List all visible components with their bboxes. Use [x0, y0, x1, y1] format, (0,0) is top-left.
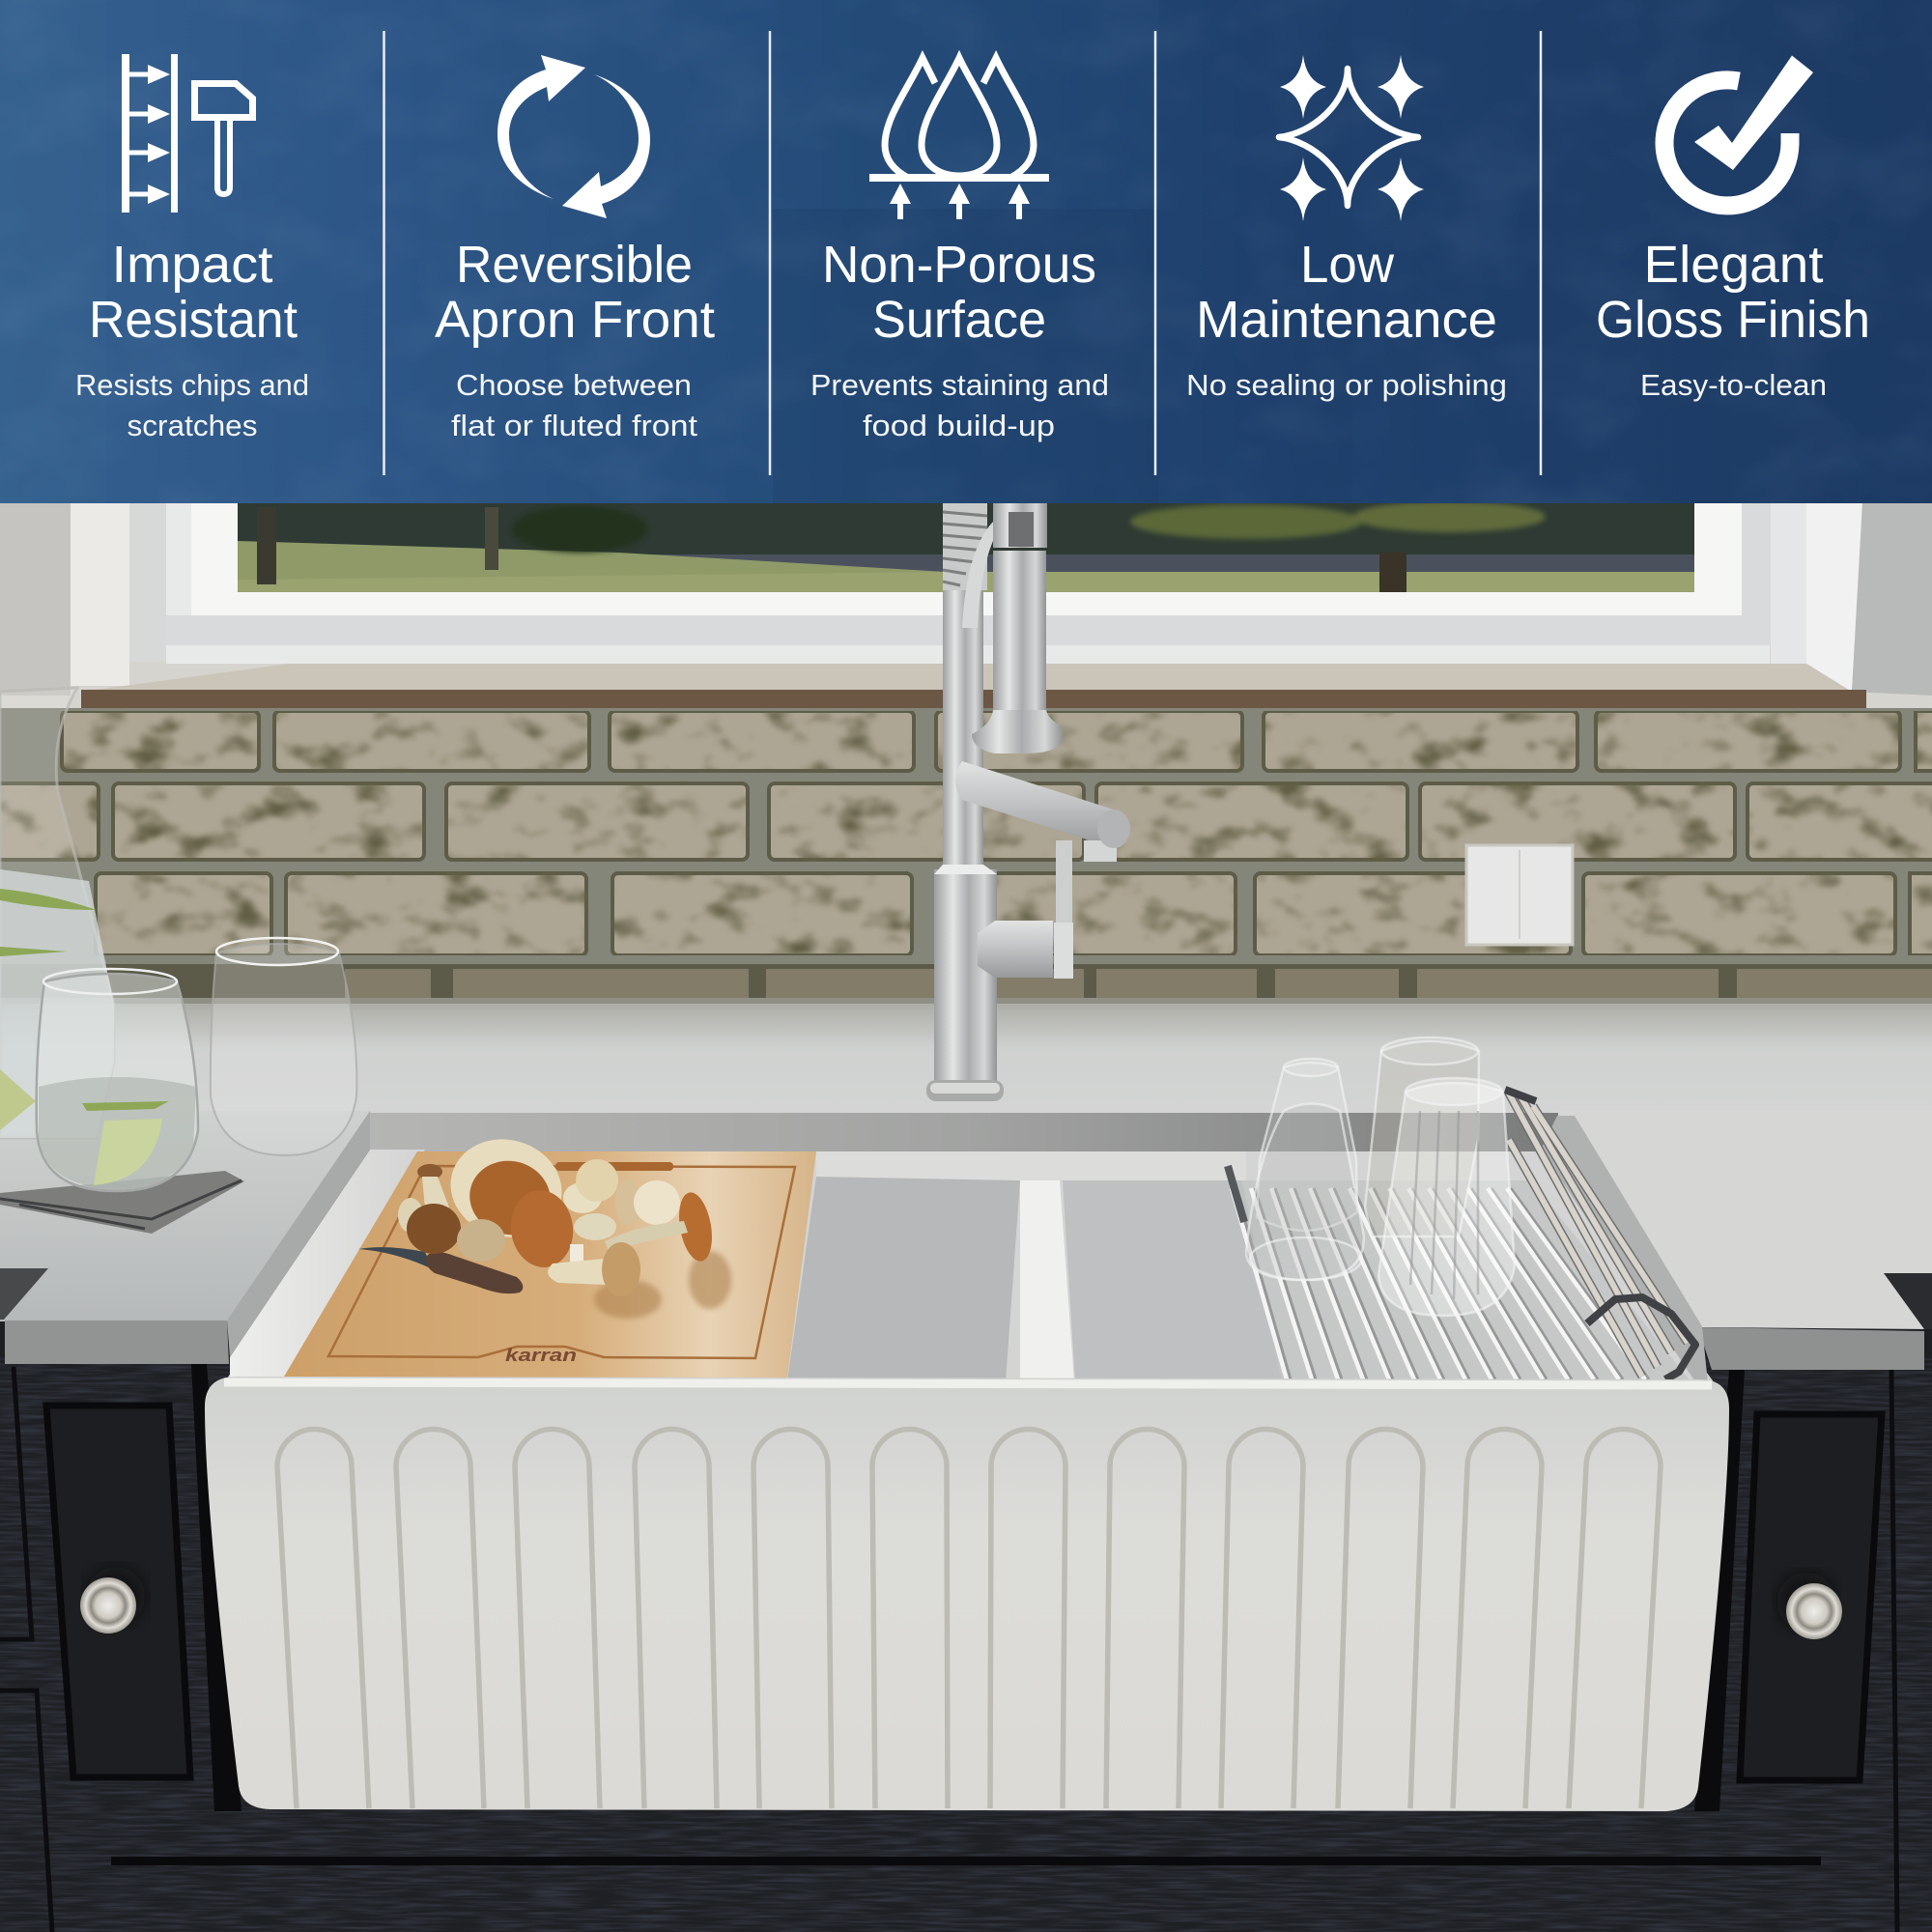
description: Easy-to-clean [1640, 368, 1827, 402]
rack clips [1228, 1090, 1695, 1379]
cabinets [0, 1357, 1932, 1932]
left basin [787, 1177, 1020, 1381]
glass back right [1365, 1037, 1479, 1236]
mushroom shadows [594, 1251, 731, 1319]
heading: Resistant [89, 291, 298, 349]
rack rods [1232, 1188, 1645, 1379]
empty glass [211, 938, 356, 1155]
feature: impact resistant [75, 54, 309, 442]
right door panel [1740, 1414, 1882, 1780]
heading [435, 236, 715, 349]
swivel spout [955, 761, 1130, 862]
countertop [0, 998, 1932, 1329]
window sill [81, 664, 1866, 708]
kitchen faucet [926, 503, 1130, 1101]
heading: Non-Porous [822, 236, 1096, 294]
left counter notch [0, 1268, 48, 1320]
description: Choose between [456, 368, 692, 402]
glass front left [1246, 1103, 1364, 1280]
icon: sparkles [1279, 55, 1424, 221]
heading: Elegant [1644, 236, 1824, 294]
heading: Reversible [456, 236, 693, 294]
upside-down drinking glasses [1246, 1037, 1515, 1316]
wall and window [0, 501, 1932, 715]
rack rod shadows [1236, 1188, 1649, 1379]
description [810, 368, 1109, 442]
basin divider [1020, 1180, 1074, 1381]
heading: Gloss Finish [1596, 291, 1870, 349]
left counter front edge [5, 1321, 229, 1364]
stainless sink rail [224, 1111, 1715, 1383]
rolled rack section [1508, 1092, 1688, 1377]
column dividers [384, 31, 1541, 475]
window view [238, 501, 1694, 592]
faucet base [926, 865, 1004, 1101]
description: Prevents staining and [810, 368, 1109, 402]
description [451, 368, 697, 442]
napkin [0, 1171, 244, 1234]
icon: reversing arrows [497, 55, 650, 218]
feature: non-porous surface [810, 58, 1109, 442]
feature: elegant gloss finish [1596, 56, 1870, 402]
brand mark: karran [505, 1346, 577, 1365]
right basin [1063, 1180, 1282, 1381]
heading: Low [1300, 236, 1395, 294]
heading: Impact [112, 236, 272, 294]
cutting board [284, 1127, 816, 1378]
heading [89, 236, 298, 349]
feature: reversible apron front [435, 55, 715, 442]
mushrooms [398, 1127, 717, 1296]
description: food build-up [863, 409, 1055, 442]
plinth groove [111, 1857, 1821, 1865]
left glassware [0, 688, 356, 1234]
sink interior [230, 1150, 1690, 1381]
dark gaps beside the sink apron [191, 1364, 242, 1811]
glass front right [1378, 1078, 1515, 1316]
heading: Apron Front [435, 291, 715, 349]
glass back left [1257, 1059, 1357, 1231]
icon: hammer striking wall [122, 54, 253, 213]
fluted arches [277, 1429, 1661, 1808]
left door panel [46, 1406, 190, 1777]
dish drying rack [1228, 1090, 1695, 1379]
heading: Surface [872, 291, 1046, 349]
feature band [0, 0, 1932, 503]
right counter front edge [1698, 1327, 1924, 1370]
coil spring and column [943, 503, 993, 869]
description: flat or fluted front [451, 409, 697, 442]
apron front of sink [205, 1377, 1729, 1811]
board groove [328, 1166, 795, 1358]
heading [1596, 236, 1870, 349]
icon: circled check mark [1664, 56, 1813, 206]
right counter notch [1884, 1273, 1932, 1329]
description: Resists chips and [75, 368, 309, 402]
heading [1196, 236, 1497, 349]
glass with lime water [37, 969, 198, 1191]
description [75, 368, 309, 442]
feature: low maintenance [1186, 55, 1507, 402]
brick backsplash [0, 708, 1932, 1003]
description: No sealing or polishing [1186, 368, 1507, 402]
knife [358, 1247, 523, 1293]
light switch [1466, 845, 1573, 945]
cabinet stiles [0, 1367, 1897, 1932]
description: scratches [128, 409, 257, 442]
heading: Maintenance [1196, 291, 1497, 349]
pitcher [0, 688, 114, 1138]
lever handle [978, 840, 1073, 979]
icon: water drops above surface [869, 58, 1049, 219]
spray head [972, 503, 1063, 753]
heading [822, 236, 1096, 349]
